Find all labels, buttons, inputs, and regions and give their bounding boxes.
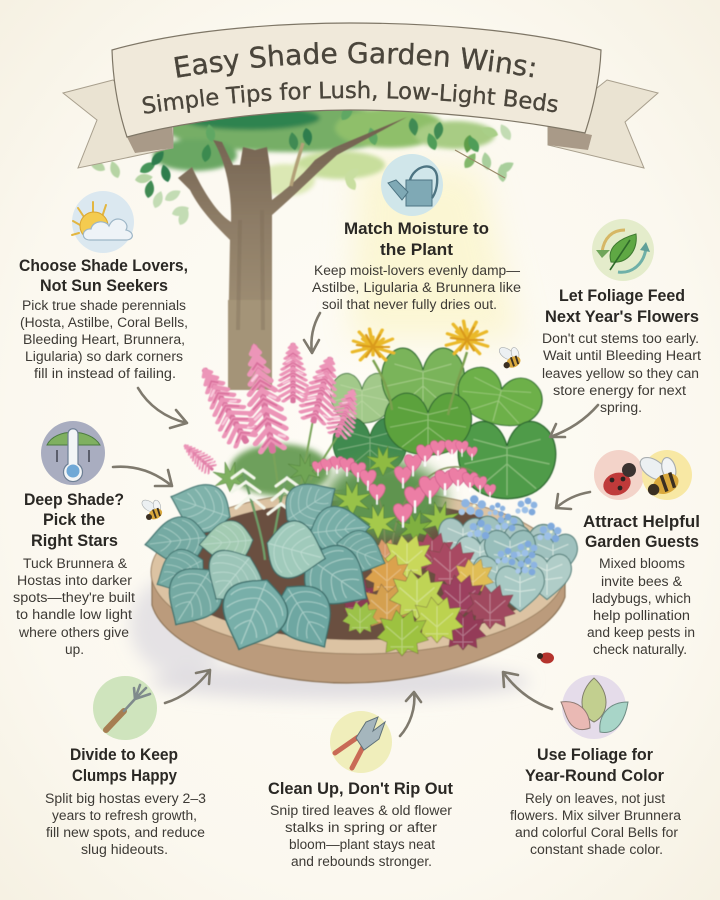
- tip: attract helpful guests: [583, 513, 700, 657]
- tip: match moisture: Astilbe, Ligularia & Brunnera like: [312, 280, 521, 295]
- tip: deep shade: Pick the: [43, 511, 105, 529]
- tip: attract helpful guests: and keep pests in: [587, 625, 695, 640]
- tip: choose shade lovers: (Hosta, Astilbe, Coral Bells,: [20, 315, 188, 330]
- title banner: Simple Tips for Lush, Low-Light Beds: [142, 80, 558, 114]
- arrow: divide to bed: [165, 670, 210, 703]
- tip: attract helpful guests: Mixed blooms: [599, 556, 685, 571]
- tip: deep shade: to handle low light: [16, 607, 132, 622]
- arrow: deep shade to plants: [113, 467, 172, 486]
- tip: match moisture: the Plant: [380, 241, 454, 259]
- banner left fold: [127, 126, 173, 153]
- tip: let foliage feed: spring.: [600, 400, 642, 415]
- arrow: moisture to plants: [304, 313, 320, 353]
- forget-me-not flowers: [458, 495, 561, 575]
- tip: let foliage feed: leaves yellow so they can: [542, 366, 699, 381]
- icon: pruning shears: [330, 711, 392, 773]
- tip: choose shade lovers: Pick true shade perennials: [22, 298, 186, 313]
- ligularia plant: [331, 321, 556, 499]
- tip: foliage for color: Rely on leaves, not just: [525, 791, 665, 806]
- tip: divide clumps: years to refresh growth,: [52, 808, 197, 823]
- icon: sun behind cloud: [72, 191, 134, 253]
- arrow: foliage feed to plants: [550, 405, 598, 437]
- banner right tail: [548, 80, 658, 168]
- tip: foliage for color: flowers. Mix silver Brunnera: [510, 808, 682, 823]
- tip: divide clumps: Clumps Happy: [72, 767, 178, 785]
- tip: clean up: bloom—plant stays neat: [289, 837, 435, 852]
- tip: choose shade lovers: [19, 257, 188, 381]
- tip: let foliage feed: Don't cut stems too early.: [542, 331, 699, 346]
- tip: let foliage feed: Let Foliage Feed: [559, 287, 685, 305]
- tip: deep shade: Tuck Brunnera &: [23, 556, 127, 571]
- tip: choose shade lovers: Bleeding Heart, Brunnera,: [23, 332, 185, 347]
- bleeding heart: [312, 440, 496, 560]
- astilbe stems and foliage: [213, 420, 337, 500]
- brunnera leaves: [439, 516, 577, 611]
- tip: foliage for color: Use Foliage for: [537, 746, 654, 764]
- tip: foliage for color: constant shade color.: [530, 842, 663, 857]
- tip: foliage for color: [510, 746, 682, 857]
- tip: match moisture: [312, 220, 521, 312]
- tip: deep shade: [13, 491, 135, 657]
- coral bells: [337, 533, 515, 656]
- hosta flower spikes: [232, 470, 298, 560]
- tip: clean up: and rebounds stronger.: [291, 854, 432, 869]
- icon: watering can: [381, 154, 443, 216]
- title banner: Easy Shade Garden Wins:: [174, 42, 535, 78]
- tip: clean up: Clean Up, Don't Rip Out: [268, 780, 453, 798]
- dappled light behind the watering tip: [350, 160, 520, 340]
- tip: deep shade: Deep Shade?: [24, 491, 124, 509]
- tip: foliage for color: and colorful Coral Bells for: [515, 825, 679, 840]
- tip: divide clumps: Split big hostas every 2–3: [45, 791, 206, 806]
- arrow: clean up to bed: [400, 692, 421, 736]
- tip: attract helpful guests: Attract Helpful: [583, 513, 700, 531]
- astilbe plumes: [180, 344, 365, 500]
- arrow: shade lovers to plants: [138, 388, 187, 428]
- tip: divide clumps: fill new spots, and reduce: [46, 825, 205, 840]
- insect: bee near hosta: [140, 498, 164, 521]
- title line 2: [143, 98, 567, 114]
- tip: clean up: stalks in spring or after: [285, 820, 438, 835]
- icon: ladybug and bee: [594, 450, 692, 500]
- tip: clean up: Snip tired leaves & old flower: [270, 803, 453, 818]
- raised garden bed: [151, 490, 565, 683]
- tip: attract helpful guests: ladybugs, which: [592, 591, 691, 606]
- tip: choose shade lovers: fill in instead of failing.: [34, 366, 176, 381]
- ligularia leaves: [331, 348, 556, 499]
- title line 1: [175, 63, 537, 78]
- pink hearts: [312, 440, 496, 528]
- tip: foliage for color: Year-Round Color: [525, 767, 665, 785]
- hosta: [142, 469, 393, 662]
- insect: ladybug on ground: [537, 652, 554, 664]
- tip: deep shade: where others give: [18, 625, 129, 640]
- ground shadow: [130, 575, 530, 700]
- tip: choose shade lovers: Not Sun Seekers: [40, 277, 168, 295]
- tip: deep shade: Hostas into darker: [17, 573, 133, 588]
- arrow: helpful guests to plants: [556, 492, 590, 509]
- tip: divide clumps: Divide to Keep: [70, 746, 178, 764]
- tip: match moisture: Keep moist-lovers evenly damp—: [314, 263, 521, 278]
- tip: match moisture: soil that never fully dries out.: [322, 297, 497, 312]
- tip: choose shade lovers: Ligularia) so dark corners: [25, 349, 183, 364]
- tip: let foliage feed: Wait until Bleeding Heart: [543, 348, 701, 363]
- icon: thermometer under shade canopy: [41, 421, 105, 485]
- arrow: foliage color to bed: [503, 672, 552, 709]
- tip: choose shade lovers: Choose Shade Lovers,: [19, 257, 188, 275]
- tip: deep shade: Right Stars: [31, 532, 118, 550]
- icon: three foliage leaves: [561, 675, 628, 739]
- tip: deep shade: up.: [65, 642, 84, 657]
- banner main: [112, 23, 601, 137]
- green palmate foliage: [315, 446, 490, 560]
- banner left tail: [63, 80, 173, 168]
- tip: let foliage feed: [542, 287, 701, 415]
- tip: attract helpful guests: Garden Guests: [585, 533, 699, 551]
- tip: attract helpful guests: invite bees &: [601, 574, 682, 589]
- tip: match moisture: Match Moisture to: [344, 220, 489, 238]
- tip: deep shade: spots—they're built: [13, 590, 135, 605]
- tip: attract helpful guests: check naturally.: [593, 642, 687, 657]
- tip: divide clumps: [45, 746, 206, 857]
- title banner: [62, 22, 659, 169]
- brunnera with blue flowers: [439, 495, 577, 611]
- tip: let foliage feed: store energy for next: [553, 383, 686, 398]
- insect: bee near ligularia: [497, 345, 522, 370]
- tip: let foliage feed: Next Year's Flowers: [545, 308, 699, 326]
- icon: garden fork: [93, 676, 157, 740]
- ligularia yellow flowers: [352, 321, 488, 415]
- banner right fold: [548, 126, 592, 150]
- tip: attract helpful guests: help pollination: [593, 608, 690, 623]
- tree canopy: [87, 103, 516, 227]
- icon: leaf with recycling arrows: [592, 219, 654, 281]
- tree trunk and branches: [178, 117, 407, 390]
- tip: clean up: [268, 780, 453, 869]
- tip: divide clumps: slug hideouts.: [81, 842, 168, 857]
